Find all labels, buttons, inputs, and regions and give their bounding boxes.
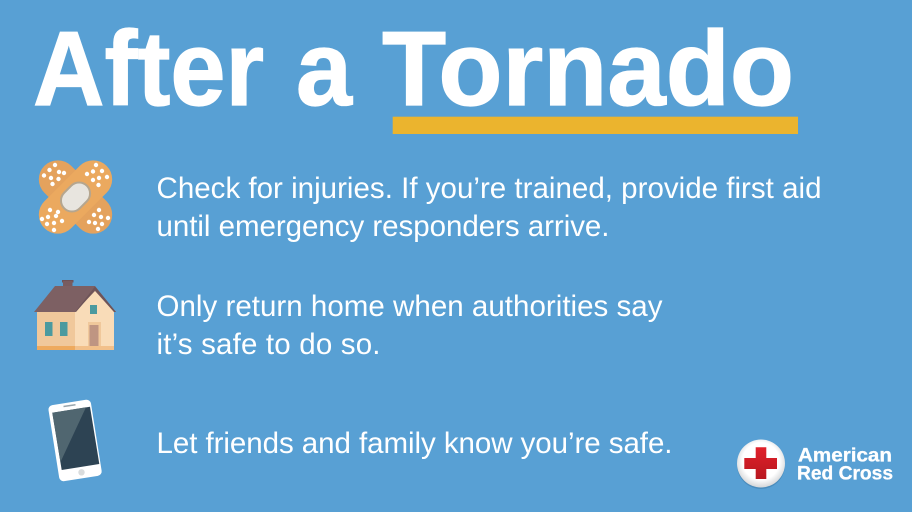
icon: house xyxy=(34,280,116,350)
title: After xyxy=(33,10,264,128)
text: let friends know: Let friends and family know you’re safe. xyxy=(156,427,672,460)
text: check for injuries xyxy=(156,172,822,243)
text: return home xyxy=(156,290,663,361)
text: check for injuries: until emergency responders arrive. xyxy=(156,210,610,243)
logo: American Red Cross: Red Cross xyxy=(797,464,893,484)
text: return home: it’s safe to do so. xyxy=(156,328,380,361)
logo: American Red Cross xyxy=(737,440,893,489)
icon: bandage xyxy=(31,152,120,242)
title xyxy=(33,10,794,128)
text: return home: Only return home when authorities say xyxy=(156,290,663,323)
title: a xyxy=(296,10,353,128)
icon: phone xyxy=(48,399,102,482)
text: check for injuries: Check for injuries. If you’re trained, provide first aid xyxy=(156,172,822,205)
logo: American Red Cross: American xyxy=(798,446,892,467)
title: Tornado xyxy=(382,10,794,128)
title underline xyxy=(393,117,798,134)
